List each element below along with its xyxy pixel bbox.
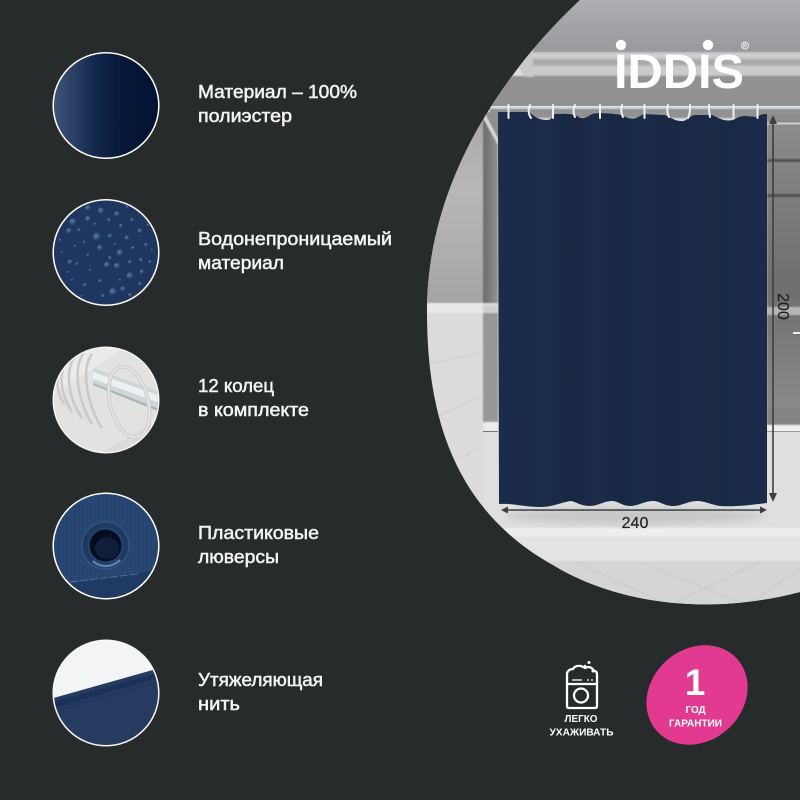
label: 200: 200 — [774, 293, 791, 320]
label: 240: 240 — [622, 515, 648, 532]
text: rings: 12 колец — [198, 376, 274, 396]
icon: washing machine — [567, 661, 597, 708]
text: material: Материал – 100% — [198, 82, 357, 102]
text: weighted thread — [198, 670, 323, 714]
text: easy care: УХАЖИВАТЬ — [550, 726, 614, 738]
tub edge — [484, 422, 498, 432]
text: waterproof: Водонепроницаемый — [198, 229, 392, 249]
curtain rod — [490, 106, 800, 110]
left wall — [415, 112, 483, 303]
swatch: fabric — [53, 52, 159, 159]
bathroom scene with curtain — [415, 0, 800, 616]
text: material — [198, 82, 357, 126]
ceiling — [532, 0, 800, 53]
text: easy care — [550, 713, 614, 738]
room backdrop — [415, 0, 800, 616]
text: weighted thread: нить — [198, 694, 240, 714]
text: grommets: люверсы — [198, 547, 279, 567]
badge: warranty — [626, 625, 768, 765]
swatch: rings on rod — [53, 347, 160, 453]
curtain rings — [508, 105, 758, 118]
text: waterproof — [198, 229, 392, 273]
plinth and floor — [502, 528, 800, 536]
text: waterproof: материал — [198, 253, 284, 273]
text: weighted thread: Утяжеляющая — [198, 670, 323, 690]
text: material: полиэстер — [198, 106, 292, 126]
swatch: weighted thread — [50, 640, 160, 750]
text: rings: в комплекте — [198, 400, 309, 420]
swatch: grommet — [53, 493, 159, 600]
text: easy care: ЛЕГКО — [564, 713, 598, 725]
swatch: water drops — [53, 199, 159, 306]
text: grommets: Пластиковые — [198, 523, 319, 543]
tiles left — [438, 416, 439, 417]
text: rings — [198, 376, 309, 420]
dimension arrow: height — [769, 115, 777, 502]
ring, right — [106, 364, 152, 439]
upper wall behind rod — [490, 76, 800, 118]
text: grommets — [198, 523, 319, 567]
badge: warranty: ГАРАНТИИ — [669, 718, 722, 730]
left wall recess — [483, 118, 498, 303]
dimension arrow: width — [501, 506, 767, 514]
badge: warranty: 1 — [685, 662, 705, 703]
badge: warranty: ГОД — [686, 704, 706, 716]
bath panel — [482, 506, 503, 528]
transparent rings, left — [58, 353, 102, 428]
logo: iddis: R — [743, 44, 747, 50]
left wainscot trim — [427, 302, 483, 312]
crown molding — [518, 47, 800, 77]
rod — [93, 368, 158, 408]
curtain — [498, 112, 767, 507]
right wall — [767, 115, 800, 425]
logo: iddis: IDDIS — [614, 46, 744, 99]
